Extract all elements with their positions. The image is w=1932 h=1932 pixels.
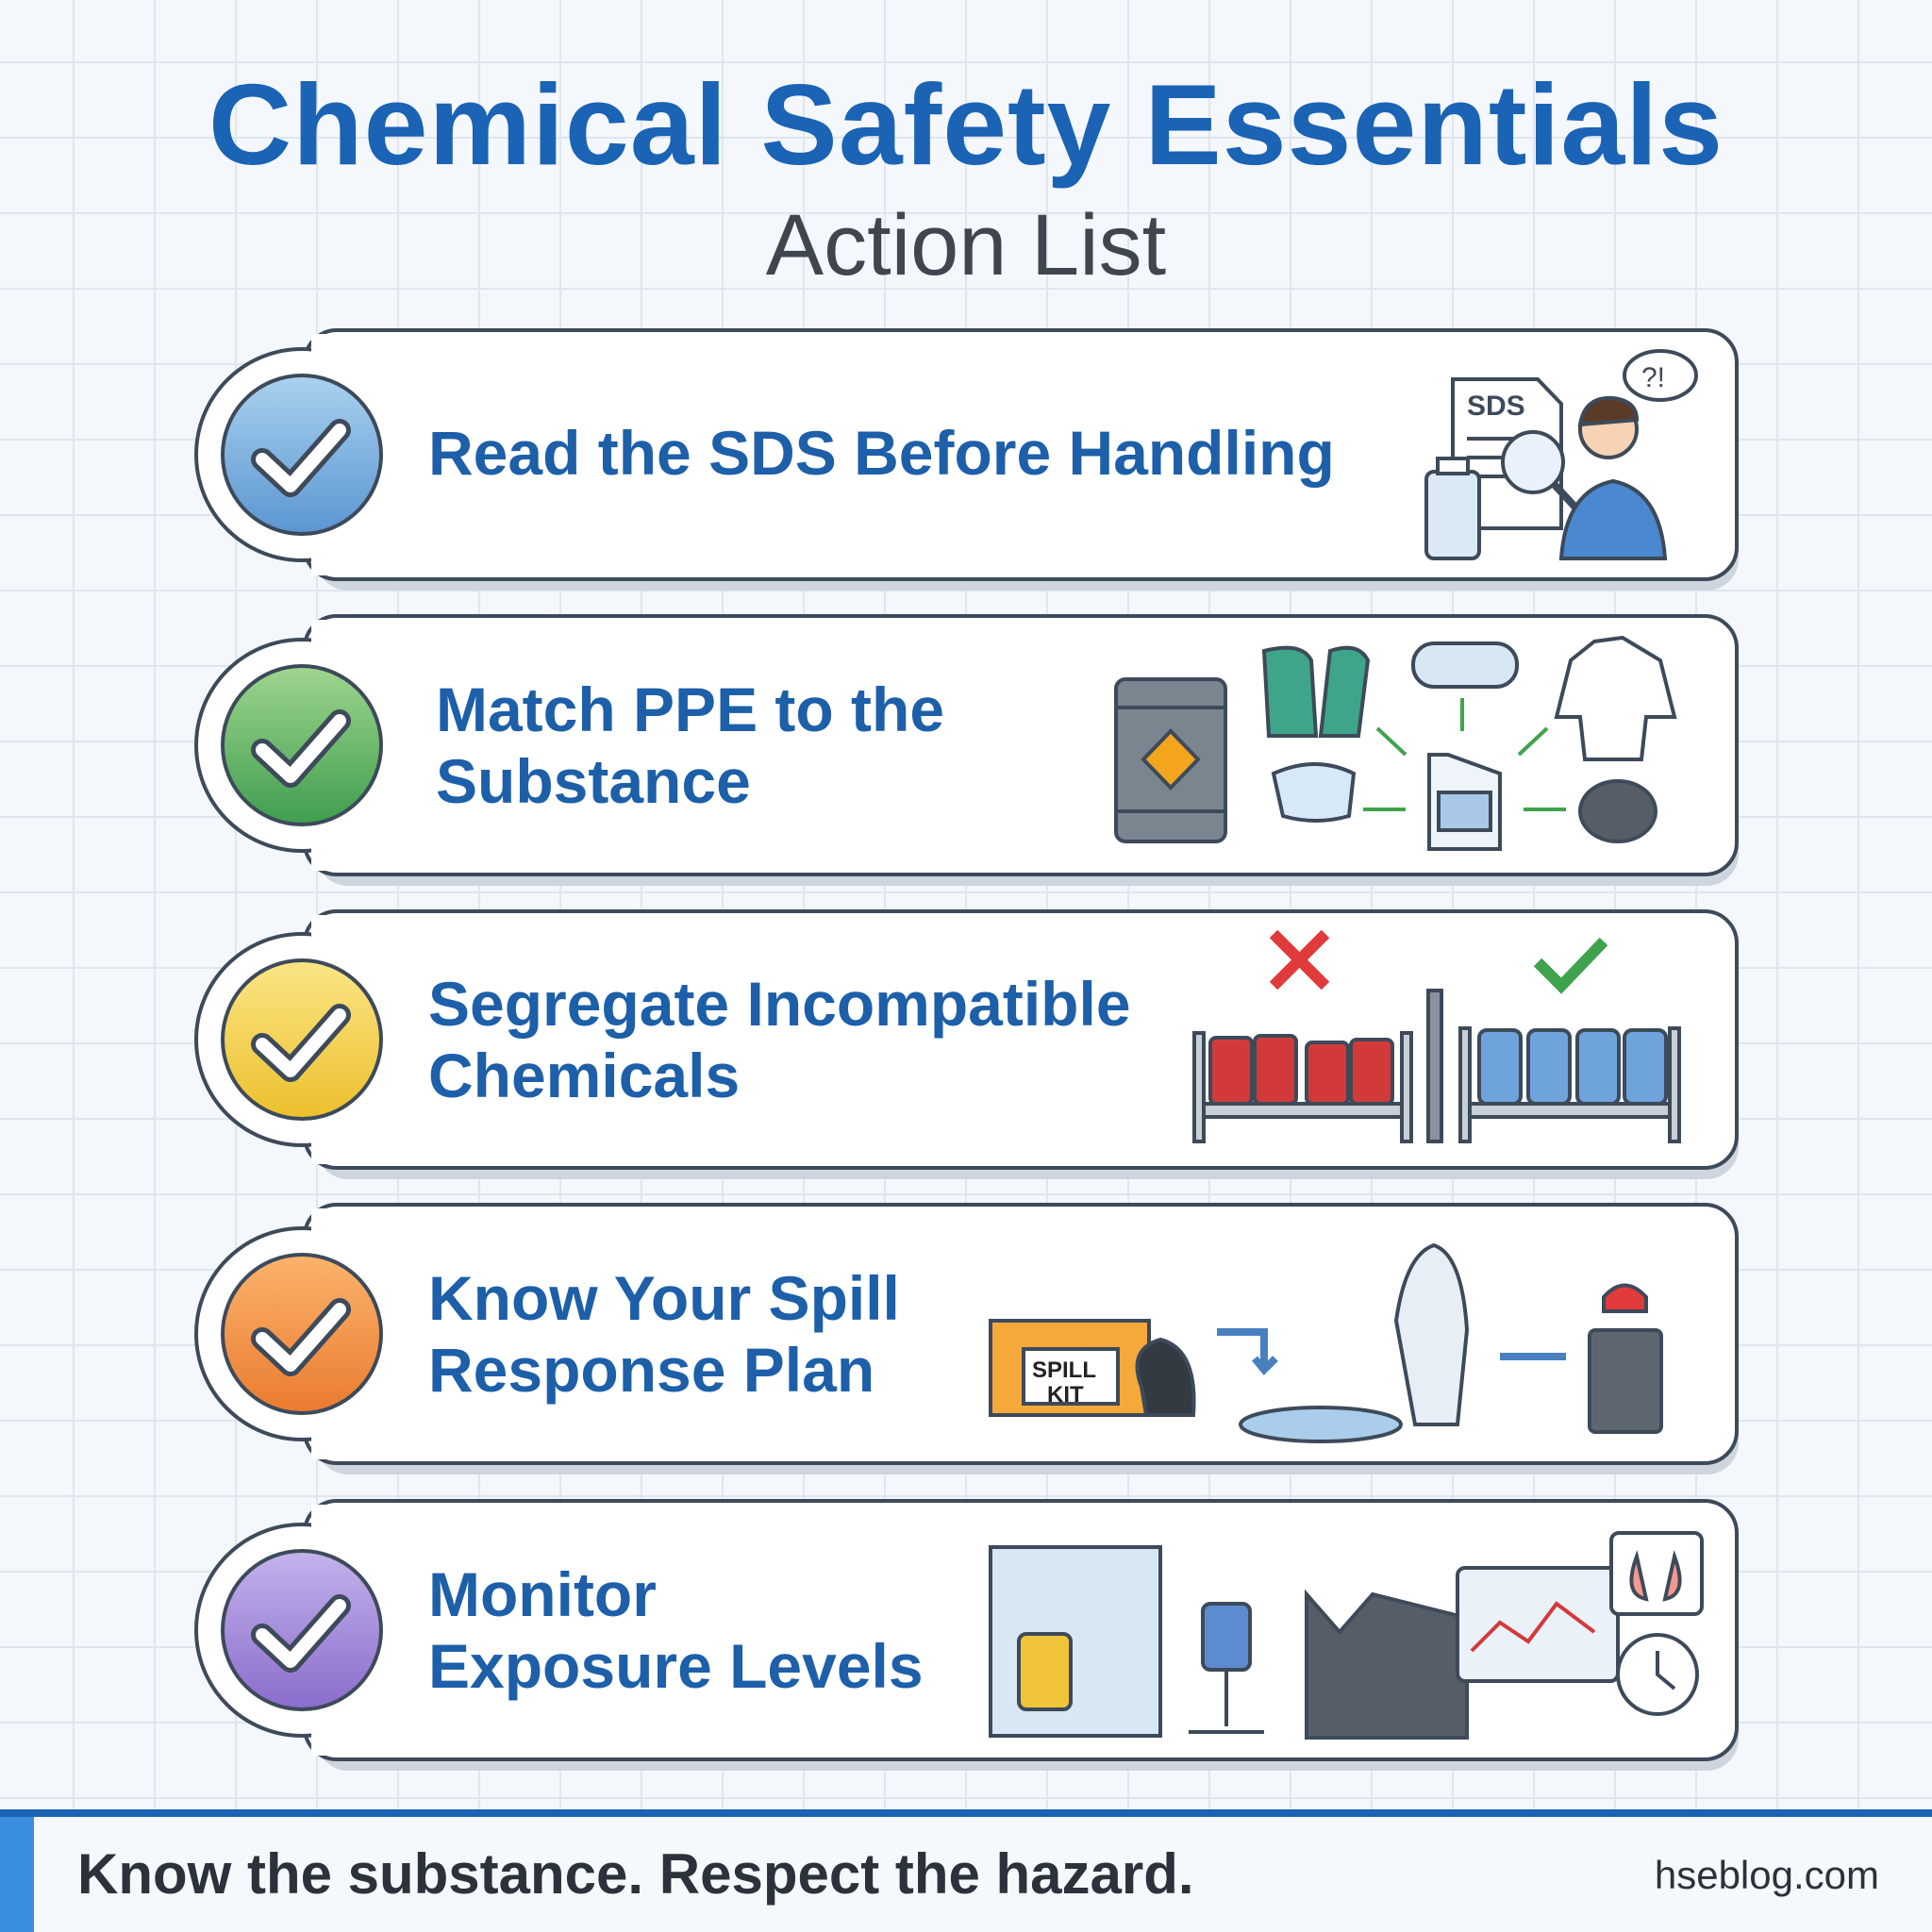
icon: spill response: SPILL [1032, 1357, 1096, 1383]
title: Chemical Safety Essentials [208, 60, 1724, 189]
icon: monitoring [991, 1533, 1702, 1738]
footer url: hseblog.com [1655, 1853, 1879, 1897]
icon: spill response [991, 1245, 1661, 1441]
text: card 5: Exposure Levels [428, 1631, 924, 1701]
text: card 3: Segregate Incompatible [428, 969, 1131, 1039]
footer tagline: Know the substance. Respect the hazard. [77, 1842, 1194, 1906]
text: card 2: Match PPE to the [436, 675, 944, 744]
subtitle: Action List [766, 197, 1166, 293]
footer bar [0, 1809, 1932, 1817]
card 1 [196, 330, 1739, 591]
text: card 3: Chemicals [428, 1041, 740, 1110]
text: card 4: Response Plan [428, 1335, 874, 1405]
card 3 [196, 911, 1739, 1179]
text: card 4 [428, 1263, 900, 1405]
card 5 [196, 1501, 1739, 1771]
icon: spill response: KIT [1047, 1382, 1084, 1407]
text: card 3 [428, 969, 1131, 1110]
icon: SDS reading person: ?! [1641, 362, 1665, 393]
text: card 2: Substance [436, 746, 751, 816]
icon: SDS reading person [1426, 351, 1696, 558]
icon: SDS reading person: SDS [1467, 391, 1525, 422]
card 2 [196, 616, 1739, 886]
icon: PPE [1116, 638, 1674, 849]
text: card 1: Read the SDS Before Handling [428, 418, 1335, 488]
text: card 5: Monitor [428, 1559, 657, 1629]
card 4 [196, 1205, 1739, 1474]
text: card 4: Know Your Spill [428, 1263, 900, 1333]
text: card 2 [436, 675, 944, 816]
text: card 5 [428, 1559, 924, 1701]
icon: segregate shelves [1194, 934, 1679, 1141]
